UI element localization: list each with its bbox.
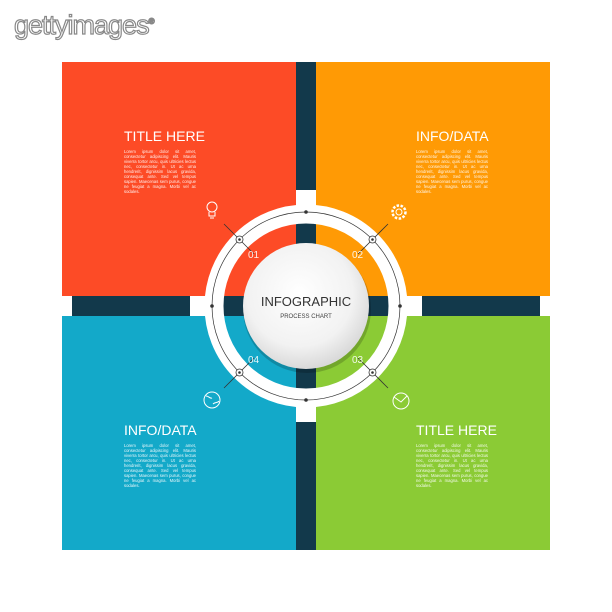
- text: orange: [416, 128, 489, 194]
- center diagram: PROCESS CHART: [280, 314, 332, 320]
- text: green: TITLE HERE: [416, 422, 497, 438]
- thin orbit line: [212, 212, 400, 400]
- numbers: 04: [248, 355, 260, 366]
- connectors: [224, 224, 388, 388]
- text: blue: Lorem ipsum dolor sit amet, consectetur adipiscing elit. Mauris viverra tortor arcu, quis ultricies lectus nec, consectetur in. Ut ac urna hendrerit, dignissim lacus gravida, consequat ante. Sed vel tempus sapien. Maecenas sem purus, congue ne feugiat a magna. Morbi vel ac sodales.: [124, 443, 196, 488]
- text: blue: INFO/DATA: [124, 422, 197, 438]
- text: blue: [124, 422, 197, 488]
- text: red: [124, 128, 205, 194]
- icons: [204, 202, 409, 409]
- panel: blue: [62, 316, 296, 550]
- center circle: [243, 245, 371, 373]
- text: red: TITLE HERE: [124, 128, 205, 144]
- text: green: Lorem ipsum dolor sit amet, consectetur adipiscing elit. Mauris viverra tortor arcu, quis ultricies lectus nec, consectetur in. Ut ac urna hendrerit, dignissim lacus gravida, consequat ante. Sed vel tempus sapien. Maecenas sem purus, congue ne feugiat a magna. Morbi vel ac sodales.: [416, 443, 488, 488]
- numbers: [248, 250, 364, 366]
- text: orange: Lorem ipsum dolor sit amet, consectetur adipiscing elit. Mauris viverra tortor arcu, quis ultricies lectus nec, consectetur in. Ut ac urna hendrerit, dignissim lacus gravida, consequat ante. Sed vel tempus sapien. Maecenas sem purus, congue ne feugiat a magna. Morbi vel ac sodales.: [416, 149, 488, 194]
- watermark logo: gettyimages®: [14, 10, 153, 40]
- text: orange: INFO/DATA: [416, 128, 489, 144]
- panel: orange: [316, 62, 550, 296]
- panel: green: [316, 316, 550, 550]
- numbers: 02: [352, 250, 364, 261]
- white ring: [214, 214, 398, 398]
- numbers: 01: [248, 250, 260, 261]
- center diagram: INFOGRAPHIC: [261, 294, 351, 309]
- dark cross background: [296, 62, 316, 550]
- numbers: 03: [352, 355, 364, 366]
- panel: red: [62, 62, 296, 296]
- text: green: [416, 422, 497, 488]
- white cross arms: [190, 190, 422, 422]
- text: red: Lorem ipsum dolor sit amet, consectetur adipiscing elit. Mauris viverra tortor arcu, quis ultricies lectus nec, consectetur in. Ut ac urna hendrerit, dignissim lacus gravida, consequat ante. Sed vel tempus sapien. Maecenas sem purus, congue ne feugiat a magna. Morbi vel ac sodales.: [124, 149, 196, 194]
